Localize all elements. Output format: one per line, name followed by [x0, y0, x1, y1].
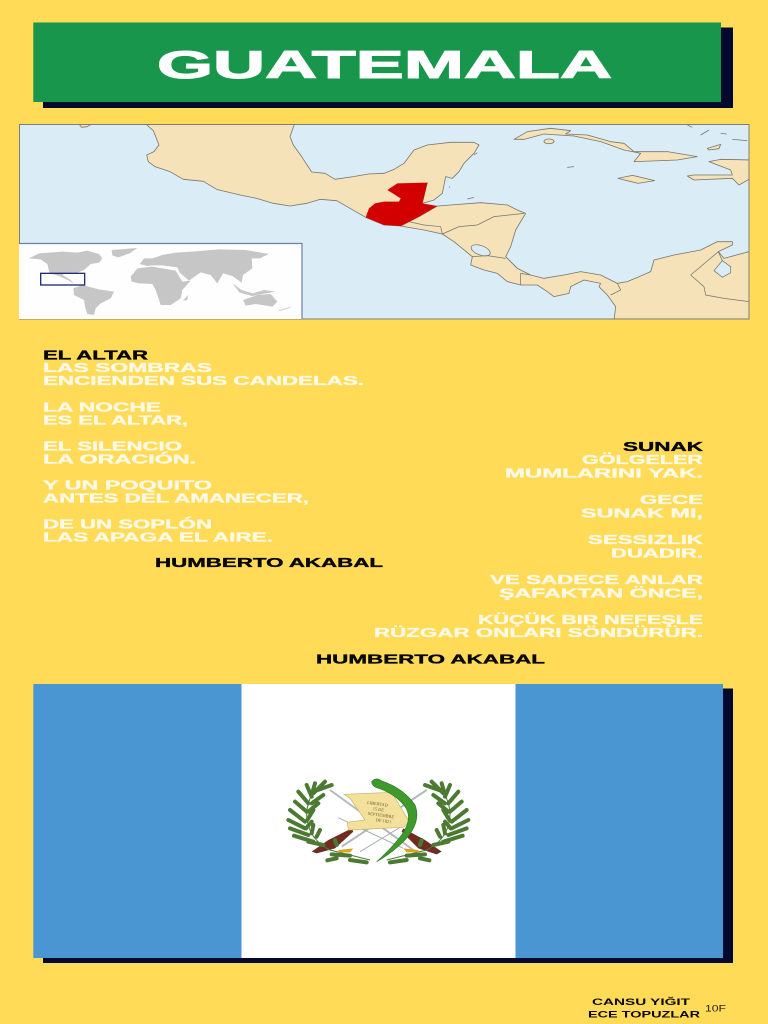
- poem: El Altar (Spanish): [43, 348, 384, 570]
- Southeast Asia islands: [232, 283, 276, 296]
- Australia silhouette: [243, 294, 277, 307]
- poem verses: LAS APAGA EL AIRE.: [43, 530, 273, 544]
- poem verses: VE SADECE ANLAR: [490, 573, 703, 587]
- poem verses: EL SILENCIO: [43, 440, 182, 454]
- poem verses: LA NOCHE: [43, 400, 161, 414]
- Central America and northern South America: [401, 203, 751, 321]
- laurel wreath left: [288, 782, 370, 862]
- map panel: Central America with Guatemala highlighted: [19, 123, 751, 321]
- Lake Nicaragua and Lake Maracaibo: [470, 243, 731, 277]
- country borders: [404, 213, 749, 302]
- poem: Sunak (Turkish): [316, 440, 703, 666]
- poem verses: SESSIZLIK: [588, 533, 703, 547]
- small islands: [449, 125, 747, 199]
- Cuba: [514, 128, 697, 162]
- Africa silhouette: [131, 267, 191, 305]
- poem verses: MUMLARINI YAK.: [505, 466, 703, 480]
- poem verses: [374, 452, 703, 640]
- poem verses: LA ORACIÓN.: [43, 452, 196, 466]
- laurel wreath right: [387, 782, 468, 862]
- Greenland silhouette: [112, 248, 137, 257]
- parchment scroll: DE 1821: [376, 817, 392, 824]
- parchment scroll: [344, 792, 409, 830]
- poem author: HUMBERTO AKABAL: [155, 556, 384, 570]
- author names: ECE TOPUZLAR: [588, 1010, 700, 1021]
- poem verses: Y UN POQUITO: [43, 478, 212, 492]
- parchment scroll: SEPTIEMBRE: [368, 811, 395, 819]
- locator rectangle: [41, 273, 85, 285]
- Madagascar silhouette: [183, 295, 188, 301]
- Eurasia silhouette: [140, 249, 269, 283]
- Jamaica: [618, 175, 655, 183]
- Guatemala highlighted in red: [366, 183, 437, 226]
- heading: Guatemala: GUATEMALA: [157, 44, 612, 87]
- poem verses: SUNAK MI,: [581, 506, 703, 520]
- poem title: SUNAK: [623, 440, 703, 454]
- poem verses: GÖLGELER: [582, 452, 703, 467]
- North America silhouette: [29, 251, 102, 283]
- poem verses: ANTES DEL AMANECER,: [43, 492, 309, 506]
- author names: [588, 996, 700, 1021]
- poem verses: ES EL ALTAR,: [43, 414, 188, 428]
- poem verses: ENCIENDEN SUS CANDELAS.: [43, 374, 364, 388]
- South America silhouette: [73, 285, 114, 315]
- parchment scroll: 15 DE: [373, 806, 385, 813]
- poem author: HUMBERTO AKABAL: [316, 652, 546, 666]
- crossed rifles and swords: [312, 790, 442, 854]
- author names: CANSU YIĞIT: [592, 996, 690, 1008]
- credits: [588, 996, 726, 1021]
- poem verses: RÜZGAR ONLARI SÖNDÜRÜR.: [374, 625, 703, 640]
- islet and Baja tip: [78, 123, 92, 127]
- flag of Guatemala: [33, 684, 733, 963]
- poem verses: KÜÇÜK BIR NEFEŞLE: [478, 612, 703, 627]
- poem verses: GECE: [640, 493, 703, 507]
- poem verses: LAS SOMBRAS: [43, 361, 212, 375]
- Mexico landmass: [145, 123, 479, 226]
- title banner: [33, 22, 733, 108]
- poem verses: DUADIR.: [611, 546, 703, 560]
- emblem: coat of arms: [288, 779, 468, 862]
- poem verses: ŞAFAKTAN ÖNCE,: [499, 586, 703, 600]
- poem verses: DE UN SOPLÓN: [43, 516, 212, 532]
- class label: 10F: [705, 1004, 726, 1014]
- poem verses: [43, 361, 364, 544]
- Hispaniola: [687, 159, 751, 185]
- quetzal bird: [372, 779, 417, 862]
- parchment scroll: LIBERTAD: [367, 800, 388, 808]
- poem title: EL ALTAR: [43, 348, 148, 362]
- inset: world locator map: [19, 244, 302, 319]
